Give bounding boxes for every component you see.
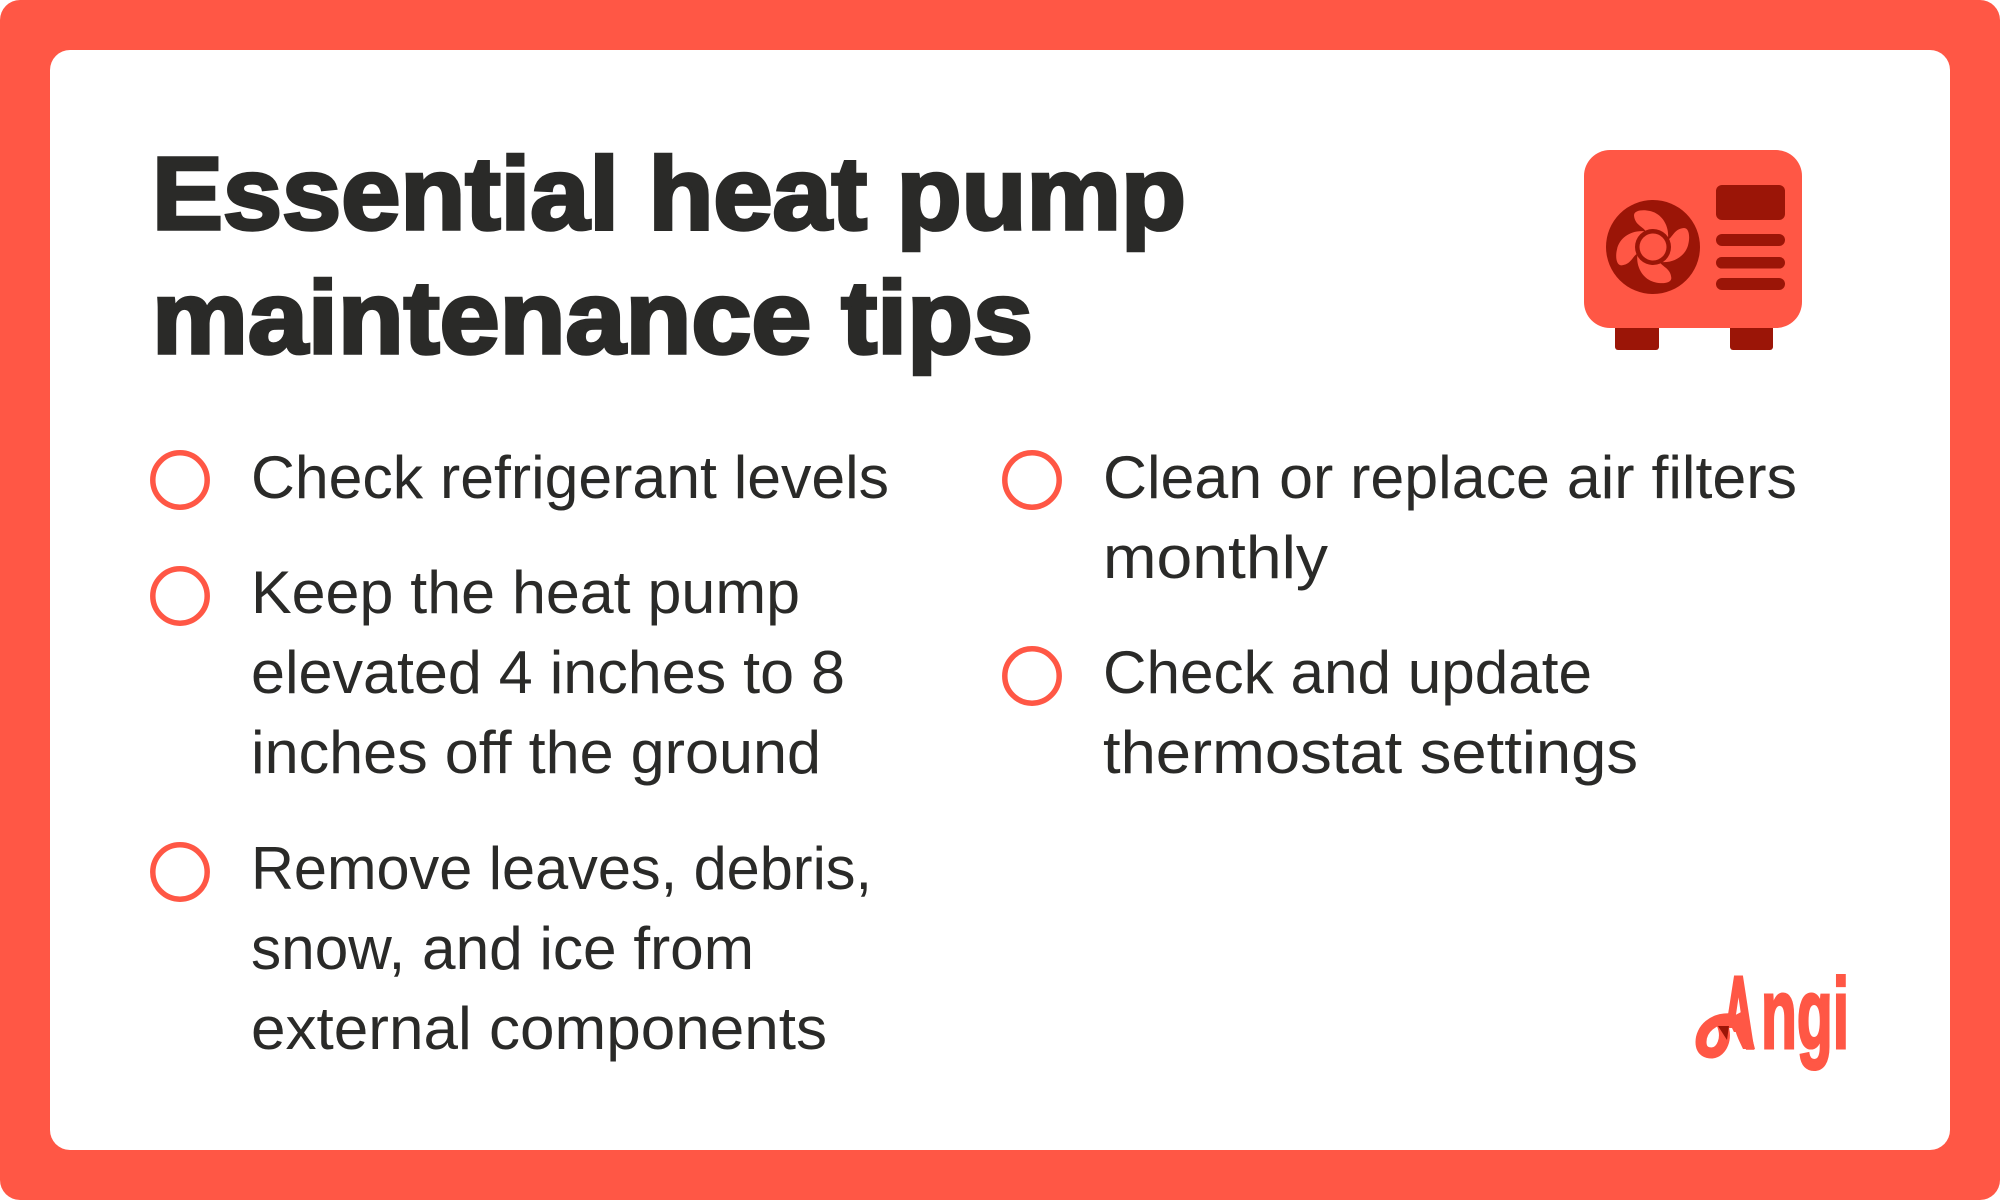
Angi logo bbox=[1701, 957, 1849, 1070]
right column list bbox=[1005, 444, 1797, 786]
tip: keep the heat pump elevated: elevated 4 inches to 8 bbox=[251, 639, 845, 706]
title: Essential heat pump bbox=[152, 136, 1186, 251]
Angi logo: A bbox=[1723, 957, 1754, 1069]
title: maintenance tips bbox=[152, 260, 1033, 375]
tip: check and update thermostat bbox=[1005, 639, 1638, 786]
tip: remove leaves and debris: Remove leaves, debris, bbox=[251, 835, 872, 902]
tip: remove leaves and debris: external components bbox=[251, 995, 827, 1062]
tip: clean or replace air filters bbox=[1005, 444, 1797, 591]
icon: heat pump unit bbox=[1584, 150, 1802, 350]
left column list bbox=[153, 444, 889, 1062]
tip: remove leaves and debris: snow, and ice from bbox=[251, 915, 754, 982]
tip: clean or replace air filters: monthly bbox=[1103, 524, 1328, 591]
tip: check and update thermostat: thermostat settings bbox=[1103, 719, 1638, 786]
tip: keep the heat pump elevated: inches off the ground bbox=[251, 719, 821, 786]
tip: check and update thermostat: Check and update bbox=[1103, 639, 1592, 706]
tip: check refrigerant levels: Check refrigerant levels bbox=[251, 444, 889, 511]
tip: clean or replace air filters: Clean or replace air filters bbox=[1103, 444, 1797, 511]
tip: remove leaves and debris bbox=[153, 835, 872, 1062]
Angi logo: ngi bbox=[1761, 958, 1849, 1070]
tip: keep the heat pump elevated: Keep the heat pump bbox=[251, 559, 800, 626]
tip: keep the heat pump elevated bbox=[153, 559, 845, 786]
title bbox=[152, 136, 1186, 375]
